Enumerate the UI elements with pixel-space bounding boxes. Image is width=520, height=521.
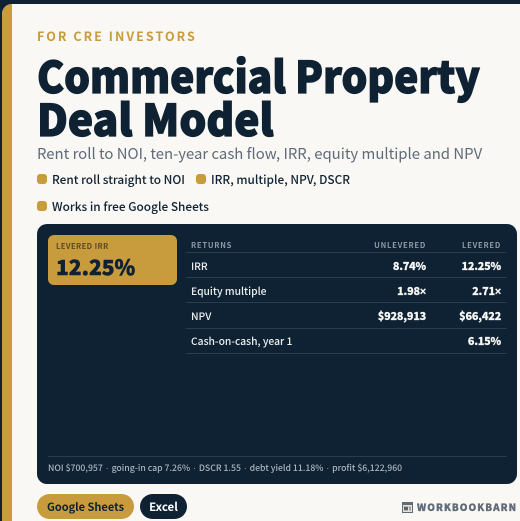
button: Excel (140, 494, 187, 519)
returns table (191, 240, 501, 349)
brand name: WORKBOOKBARN (417, 500, 517, 514)
title: Commercial Property (37, 43, 480, 106)
title (37, 43, 480, 149)
callout: levered IRR (48, 235, 177, 285)
returns table: 1.98× (397, 283, 426, 299)
returns table: 2.71× (472, 283, 501, 299)
returns table: 8.74% (393, 258, 426, 274)
table header: RETURNS (191, 240, 232, 251)
brand logo (402, 500, 517, 514)
feature: rent roll: Rent roll straight to NOI (52, 171, 185, 188)
summary metrics: NOI $700,957 · going-in cap 7.26% · DSCR 1.55 · debt yield 11.18% · profit $6,122,960 (48, 461, 402, 474)
eyebrow label: FOR CRE INVESTORS (37, 26, 197, 45)
gold accent strip (2, 4, 12, 521)
returns table: $928,913 (378, 308, 426, 324)
callout label: LEVERED IRR (56, 241, 109, 252)
returns table: $66,422 (459, 308, 501, 324)
button: Excel: Excel (149, 499, 178, 515)
row: IRR: IRR (191, 258, 208, 273)
button: Google Sheets (37, 494, 134, 519)
subtitle: Rent roll to NOI, ten-year cash flow, IRR, equity multiple and NPV (37, 143, 482, 164)
row: equity multiple: Equity multiple (191, 283, 266, 298)
callout value: 12.25% (56, 252, 135, 282)
returns table: 12.25% (461, 258, 501, 274)
returns table: 6.15% (468, 333, 501, 349)
panel: returns (37, 224, 517, 484)
title: Deal Model (37, 86, 274, 149)
icon: workbook (402, 502, 413, 513)
feature: google sheets: Works in free Google Sheets (52, 198, 209, 215)
feature: returns: IRR, multiple, NPV, DSCR (211, 171, 350, 188)
button: Google Sheets: Google Sheets (47, 499, 124, 515)
row: NPV: NPV (191, 308, 211, 323)
returns table: UNLEVERED (374, 240, 426, 251)
returns table: LEVERED (462, 240, 501, 251)
row: cash-on-cash: Cash-on-cash, year 1 (191, 333, 292, 348)
